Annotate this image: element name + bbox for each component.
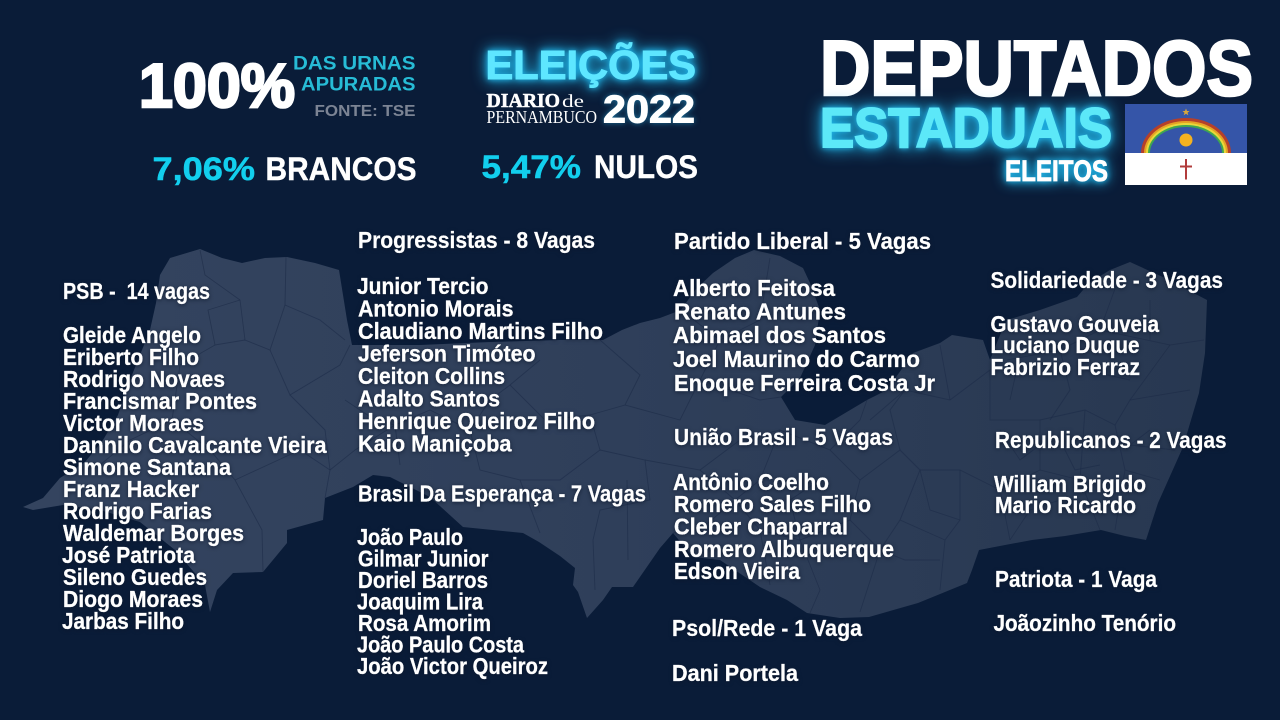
panel: Psol/Rede [672, 615, 862, 686]
list: Progressistas names: Adalto Santos [358, 386, 500, 412]
panel: Republicanos [994, 427, 1226, 518]
heading: Psol/Rede: Psol/Rede - 1 Vaga [672, 615, 862, 641]
list: PSB names: Rodrigo Novaes [63, 366, 225, 392]
list: PSB names [62, 322, 327, 634]
nulos stat [482, 149, 698, 185]
icon: pernambuco flag [1125, 104, 1247, 188]
brancos stat: 7,06% [152, 151, 255, 187]
diario de pernambuco logo: DIARIO [486, 91, 560, 112]
diario de pernambuco logo [486, 91, 597, 127]
das urnas apuradas: APURADAS [301, 74, 416, 96]
das urnas apuradas [293, 52, 416, 96]
list: Progressistas names: Kaio Maniçoba [358, 430, 512, 456]
eleitos label: ELEITOS [1005, 155, 1108, 188]
list: PSB names: Waldemar Borges [63, 520, 244, 546]
list: Progressistas names: Cleiton Collins [358, 363, 505, 389]
list: União Brasil names [673, 469, 894, 584]
list: Partido Liberal names: Enoque Ferreira Costa Jr [674, 370, 935, 396]
list: União Brasil names: Antônio Coelho [673, 469, 829, 495]
panel: Brasil Da Esperança [357, 480, 646, 679]
heading: PSB: PSB - 14 vagas [63, 278, 210, 304]
list: Brasil Da Esperança names: João Paulo [357, 524, 463, 550]
list: Psol/Rede names: Dani Portela [672, 660, 799, 686]
heading: Solidariedade: Solidariedade - 3 Vagas [990, 267, 1223, 293]
list: Partido Liberal names: Renato Antunes [674, 298, 846, 324]
heading: União Brasil: União Brasil - 5 Vagas [674, 424, 893, 450]
heading: Partido Liberal: Partido Liberal - 5 Vagas [674, 228, 931, 254]
list: Progressistas names: Henrique Queiroz Filho [358, 408, 595, 434]
list: Republicanos names: Mario Ricardo [995, 492, 1136, 518]
source: FONTE: TSE [314, 103, 416, 120]
list: Solidariedade names: Luciano Duque [990, 332, 1140, 358]
list: Solidariedade names [990, 311, 1160, 380]
list: PSB names: José Patriota [62, 542, 196, 568]
estaduais heading: ESTADUAIS [820, 96, 1112, 159]
title: eleicoes 2022 logo [486, 42, 696, 132]
list: Partido Liberal names: Abimael dos Santos [673, 322, 886, 348]
list: PSB names: Dannilo Cavalcante Vieira [63, 432, 327, 458]
list: PSB names: Simone Santana [63, 454, 232, 480]
list: Brasil Da Esperança names: Gilmar Junior [358, 546, 488, 572]
brancos stat [152, 151, 416, 187]
diario de pernambuco logo: de [562, 91, 584, 111]
list: Republicanos names: William Brigido [994, 471, 1146, 497]
list: Progressistas names: Claudiano Martins Filho [358, 318, 603, 344]
list: Patriota names: Joãozinho Tenório [994, 610, 1176, 636]
title: deputados estaduais eleitos [820, 24, 1253, 188]
panel: União Brasil [673, 424, 894, 584]
big percentage: 100% [139, 52, 295, 121]
list: Progressistas names [357, 273, 603, 456]
eleicoes neon heading: ELEIÇÕES [486, 42, 696, 88]
list: Partido Liberal names [673, 275, 935, 396]
list: PSB names: Francismar Pontes [63, 388, 257, 414]
diario de pernambuco logo: PERNAMBUCO [486, 107, 597, 127]
panel: Partido Liberal [673, 228, 935, 396]
list: PSB names: Victor Moraes [63, 410, 204, 436]
heading: Patriota: Patriota - 1 Vaga [995, 566, 1157, 592]
list: União Brasil names: Cleber Chaparral [674, 514, 848, 540]
list: Brasil Da Esperança names: Doriel Barros [358, 567, 488, 593]
list: Solidariedade names: Fabrizio Ferraz [990, 354, 1140, 380]
list: Brasil Da Esperança names: Joaquim Lira [357, 588, 484, 614]
heading: Progressistas: Progressistas - 8 Vagas [358, 227, 595, 253]
panel: Progressistas [357, 227, 603, 456]
list: Republicanos names [994, 471, 1146, 518]
list: Progressistas names: Antonio Morais [358, 296, 514, 322]
list: PSB names: Rodrigo Farias [63, 498, 212, 524]
nulos stat: NULOS [594, 149, 698, 185]
list: Solidariedade names: Gustavo Gouveia [990, 311, 1160, 337]
heading: Brasil Da Esperança: Brasil Da Esperança - 7 Vagas [358, 480, 646, 506]
panel: PSB [62, 278, 327, 634]
header: urnas apuradas [139, 52, 416, 121]
heading: Republicanos: Republicanos - 2 Vagas [995, 427, 1226, 453]
year: 2022 [603, 89, 695, 132]
list: PSB names: Franz Hacker [63, 476, 199, 502]
list: Partido Liberal names: Alberto Feitosa [673, 275, 836, 301]
list: Brasil Da Esperança names: João Victor Queiroz [357, 653, 548, 679]
brancos stat: BRANCOS [266, 151, 416, 187]
list: PSB names: Jarbas Filho [62, 608, 184, 634]
panel: Patriota [994, 566, 1176, 636]
list: PSB names: Eriberto Filho [63, 344, 199, 370]
list: Brasil Da Esperança names [357, 524, 548, 679]
list: Brasil Da Esperança names: Rosa Amorim [358, 610, 491, 636]
das urnas apuradas: DAS URNAS [293, 52, 416, 74]
map of Pernambuco [23, 249, 1207, 618]
panel: Solidariedade [990, 267, 1223, 380]
list: Progressistas names: Junior Tercio [357, 273, 488, 299]
list: Brasil Da Esperança names: João Paulo Costa [357, 632, 525, 658]
nulos stat: 5,47% [482, 149, 581, 185]
list: PSB names: Sileno Guedes [63, 564, 207, 590]
list: União Brasil names: Romero Albuquerque [674, 536, 894, 562]
list: Partido Liberal names: Joel Maurino do Carmo [673, 346, 920, 372]
list: PSB names: Gleide Angelo [63, 322, 201, 348]
list: Progressistas names: Jeferson Timóteo [358, 340, 536, 366]
list: PSB names: Diogo Moraes [63, 586, 203, 612]
list: União Brasil names: Edson Vieira [674, 558, 801, 584]
list: União Brasil names: Romero Sales Filho [674, 491, 871, 517]
